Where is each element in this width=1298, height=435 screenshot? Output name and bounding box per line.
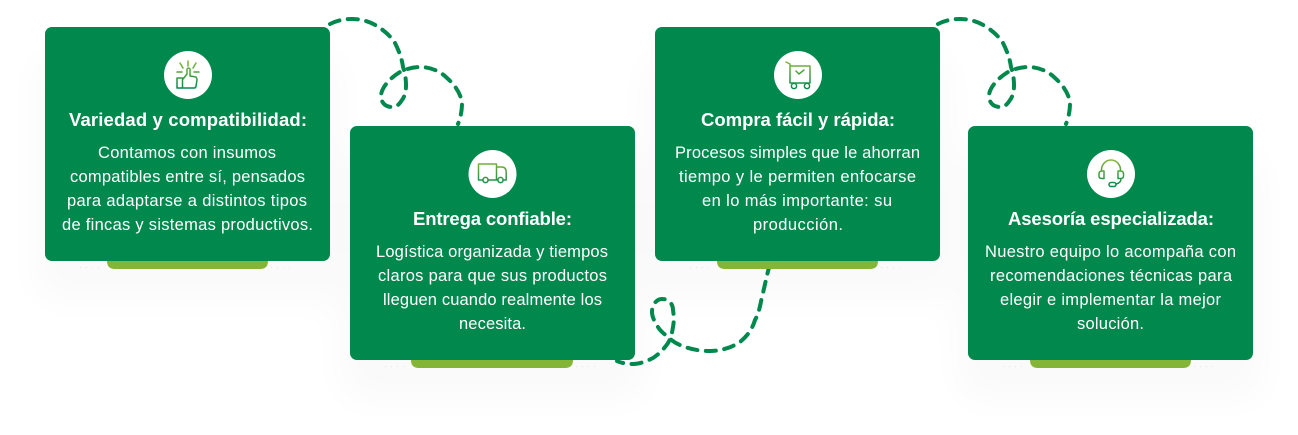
panel: Asesoría especializada [968,126,1253,368]
dashed connector: card 3 to card 4 [938,19,1070,124]
panel: Compra fácil y rápida [655,27,940,269]
body text: Logística organizada y tiempos [376,243,608,261]
body text: para adaptarse a distintos tipos [67,192,307,210]
body text: de fincas y sistemas productivos. [62,216,313,234]
body text: Nuestro equipo lo acompaña con [985,243,1236,261]
heading: Compra fácil y rápida: [701,109,895,130]
icon: delivery truck [468,150,516,198]
body text: compatibles entre sí, pensados [70,168,305,186]
body text: producción. [753,216,843,234]
icon: headset [1087,150,1135,198]
dashed connector: card 2 to card 3 [617,264,770,364]
body text: claros para que sus productos [378,267,607,285]
body text: necesita. [459,315,526,333]
body text: lleguen cuando realmente los [383,291,602,309]
panel: Entrega confiable [350,126,635,368]
body text [985,243,1236,333]
card background [655,27,940,261]
heading: Variedad y compatibilidad: [69,109,307,130]
green accent bar [107,255,268,269]
icon: thumbs up [164,51,212,99]
body text: Procesos simples que le ahorran [675,144,920,162]
body text: recomendaciones técnicas para [990,267,1233,285]
card background [968,126,1253,360]
panel: Variedad y compatibilidad [45,27,330,269]
green accent bar [717,255,878,269]
body text: Contamos con insumos [98,144,276,162]
body text: elegir e implementar la mejor [1000,291,1222,309]
body text [675,144,920,234]
body text: tiempo y le permiten enfocarse [679,168,916,186]
body text [62,144,313,234]
icon: shopping cart [774,51,822,99]
body text: en lo más importante: su [702,192,892,210]
green accent bar [411,354,573,368]
dashed connector: card 1 to card 2 [330,19,462,124]
heading: Entrega confiable: [413,208,572,229]
body text: solución. [1077,315,1144,333]
body text [376,243,608,333]
soft card shadows [35,55,1263,400]
card background [350,126,635,360]
card background [45,27,330,261]
green accent bar [1030,354,1191,368]
heading: Asesoría especializada: [1008,208,1214,229]
